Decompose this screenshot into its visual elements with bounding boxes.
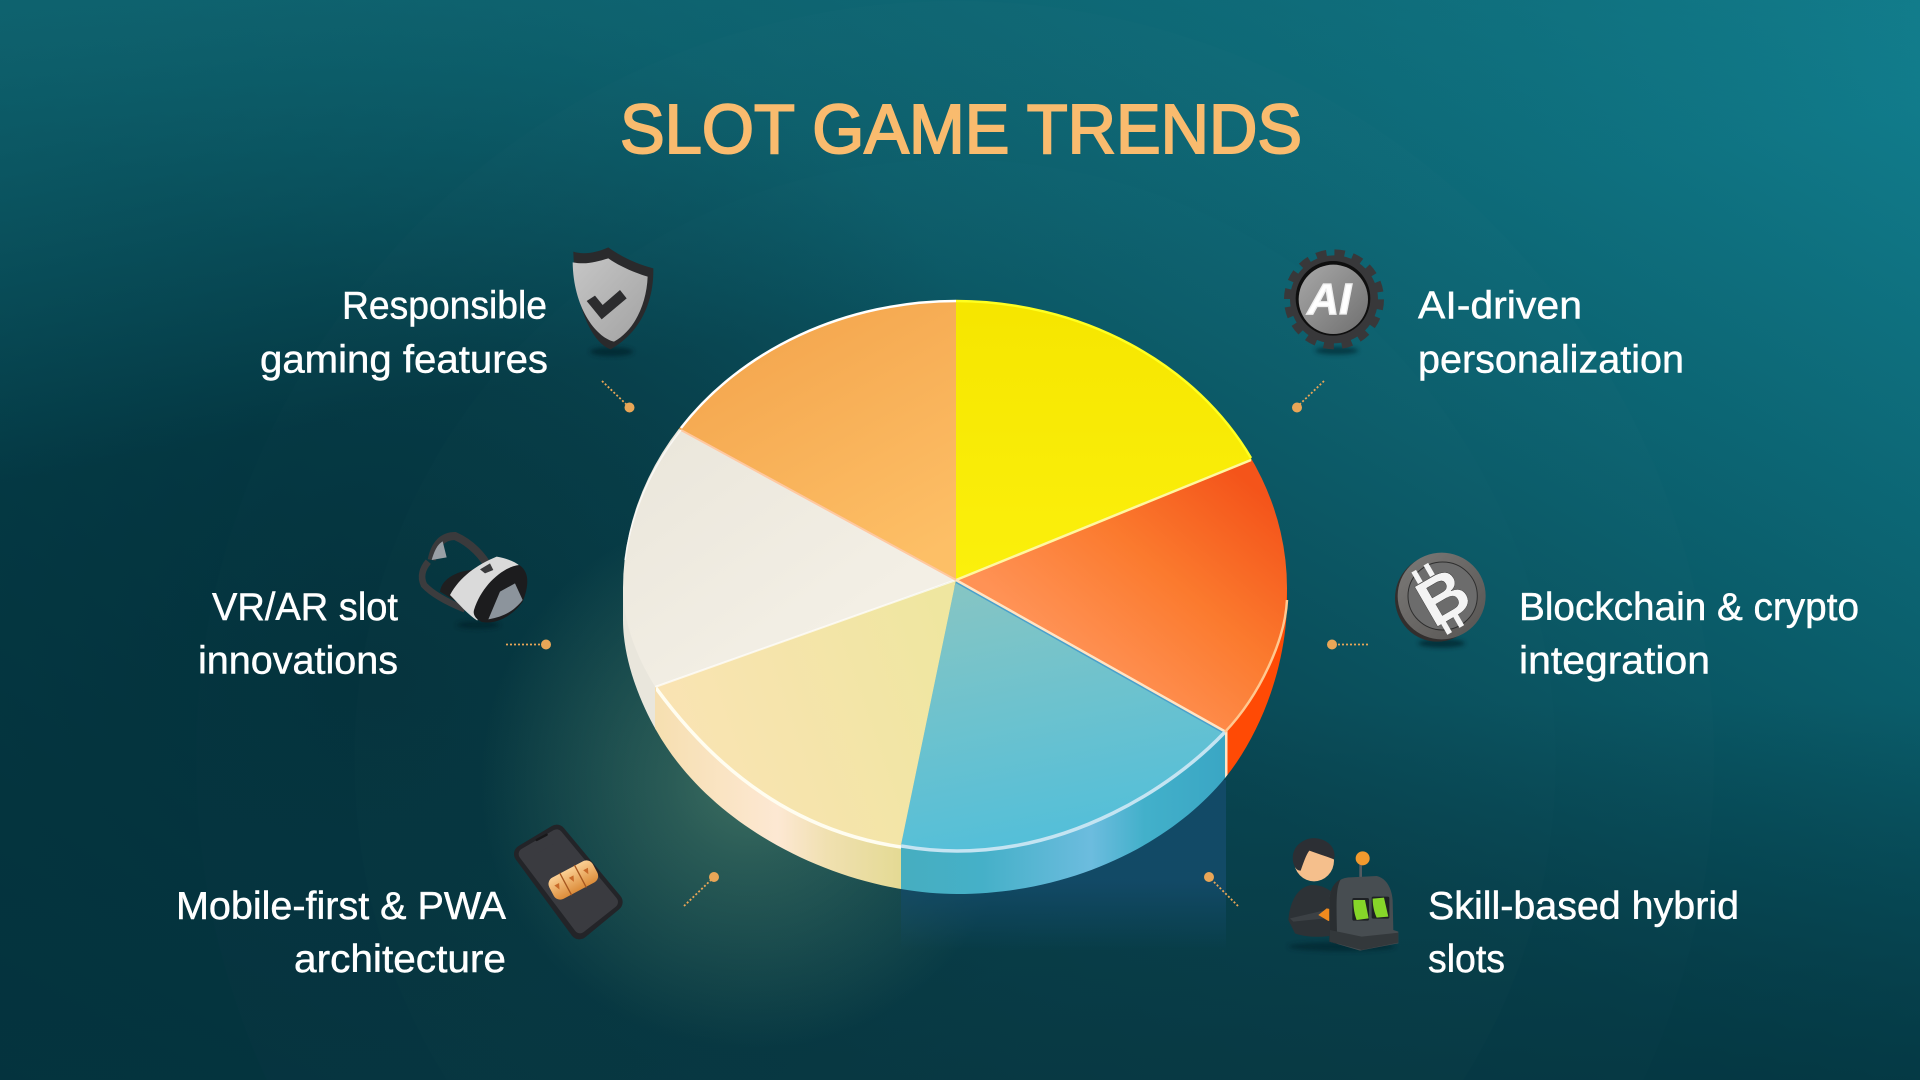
pie chart [623,300,1288,932]
callout: Skill-based hybrid slots [1204,838,1739,981]
label text: innovations [198,640,398,682]
label text [198,586,398,682]
slice: VR/AR innovations [623,428,954,687]
label text: architecture [294,938,506,981]
label text: Skill-based hybrid [1428,885,1739,928]
callout: Responsible gaming features [260,247,653,412]
icon: VR headset [422,536,527,629]
label text [176,885,506,981]
callout: AI-driven personalization [1287,253,1684,412]
connector dot [602,381,634,412]
connector dot [1204,872,1238,906]
slice: AI-driven personalization [956,302,1252,579]
label text: integration [1519,640,1710,682]
slice: blockchain and crypto [958,460,1287,730]
icon: player and slot machine [1288,838,1398,951]
callout: VR/AR slot innovations [198,536,551,682]
connector dot [1327,640,1370,650]
label text: Blockchain & crypto [1519,586,1859,629]
label text [260,284,548,382]
title: SLOT GAME TRENDS [620,90,1302,168]
label text: personalization [1418,338,1684,382]
connector dot [1292,381,1324,412]
icon: AI gear: AI [1306,275,1352,324]
icon: shield with check [573,247,653,356]
callout: Blockchain and crypto integration [1327,553,1859,682]
icon: phone with reels [523,834,613,930]
connector dot [506,640,551,650]
icon: AI gear [1287,253,1381,355]
label text: slots [1428,938,1505,981]
pie top surface [623,302,1287,850]
slice: responsible gaming [678,302,956,579]
pie side wall [623,588,1287,894]
icon: bitcoin coin: B [1404,554,1483,642]
label text [1428,885,1739,981]
callout: Mobile-first and PWA architecture [176,834,719,981]
label text: AI-driven [1418,284,1582,328]
label text: Responsible [342,284,547,328]
label text: Mobile-first & PWA [176,885,506,928]
slice: skill-based hybrid [902,581,1222,850]
connector dot [684,872,719,906]
pie reflection [901,780,1226,955]
slice: mobile-first and PWA [688,580,956,846]
label text: VR/AR slot [212,586,398,629]
label text: gaming features [260,338,548,382]
label text [1519,586,1859,682]
label text [1418,284,1684,382]
